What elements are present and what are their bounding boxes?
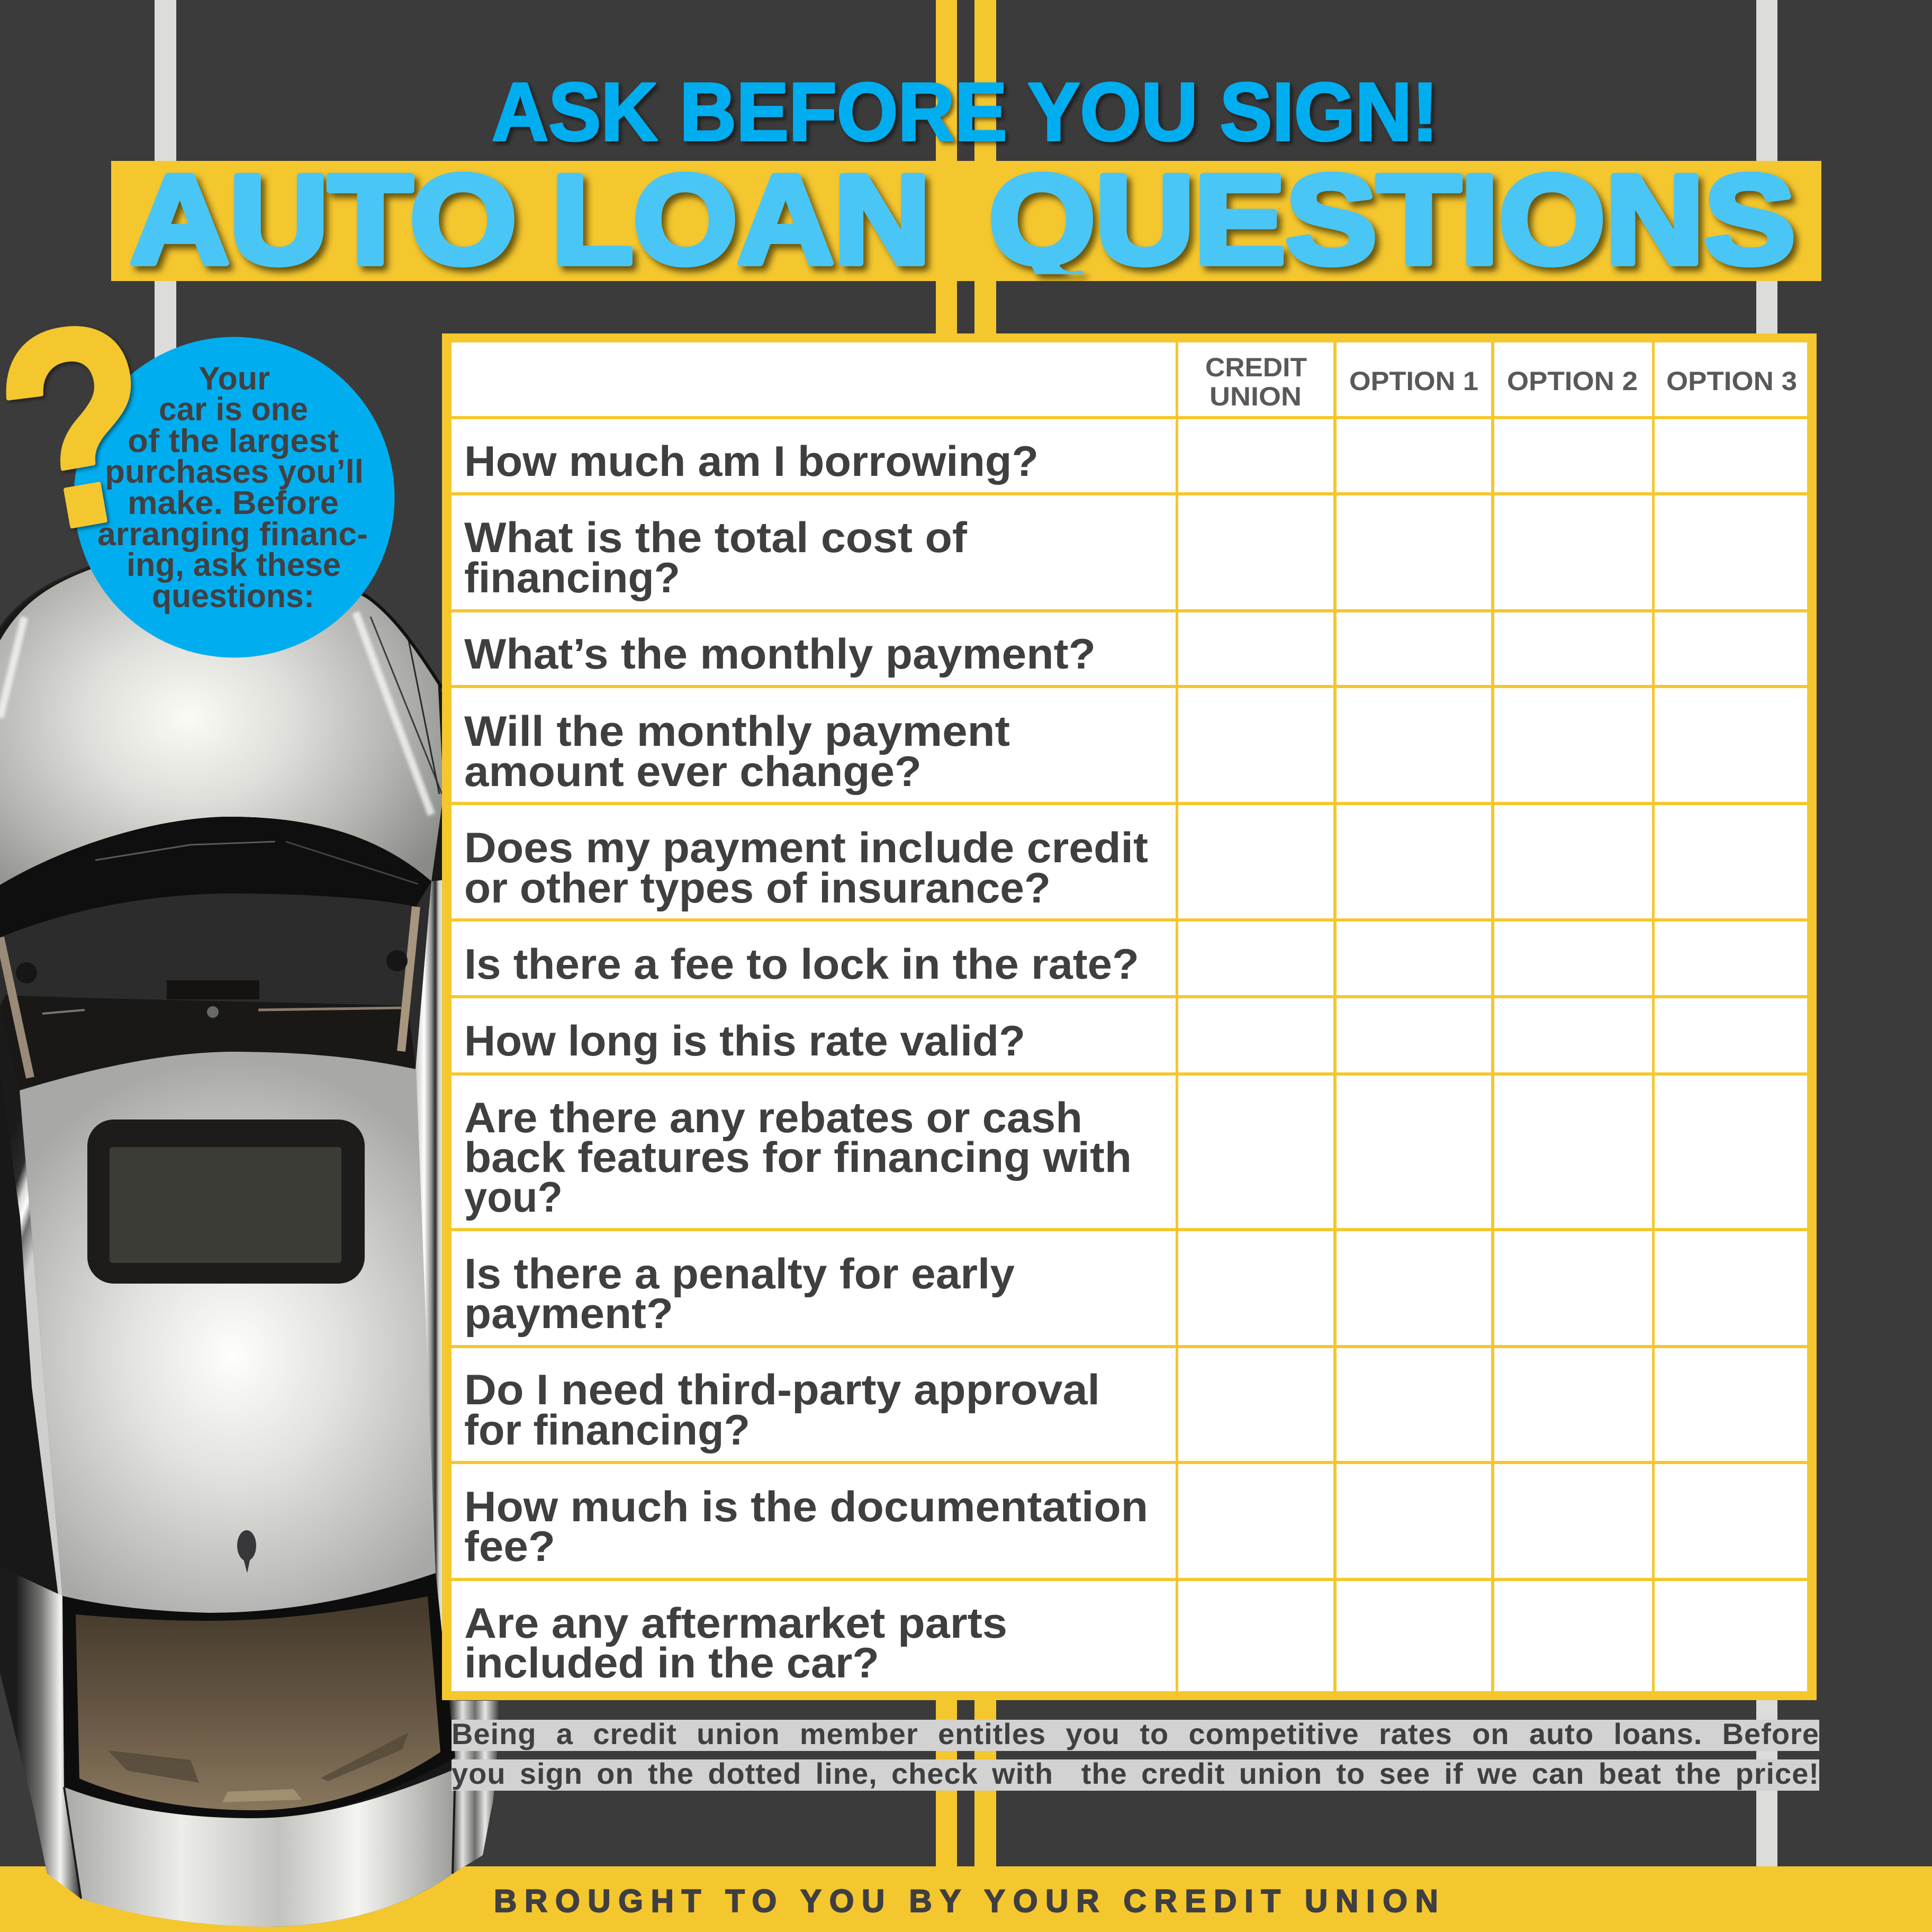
- intro text: car is one: [159, 391, 308, 428]
- grid lines: [452, 342, 1807, 1691]
- question list: Will the monthly payment: [464, 708, 1010, 755]
- intro text: arranging financ-: [97, 516, 368, 553]
- question list: Is there a fee to lock in the rate?: [464, 941, 1139, 988]
- question list: payment?: [464, 1290, 673, 1338]
- title: auto loan questions: LOAN: [552, 149, 931, 290]
- intro text: questions:: [152, 578, 314, 615]
- trunk edge lines: [64, 1769, 455, 1899]
- question list: Does my payment include credit: [464, 824, 1148, 872]
- column headers: UNION: [1209, 382, 1302, 411]
- sunroof: [87, 1120, 365, 1284]
- double yellow center line: [936, 0, 996, 1866]
- right side trim: [416, 879, 455, 1769]
- table body: [452, 342, 1807, 1691]
- circle background: [74, 337, 395, 657]
- question list: for financing?: [464, 1406, 750, 1454]
- question list: amount ever change?: [464, 748, 922, 796]
- rear window interior: [76, 1596, 440, 1810]
- question list: What is the total cost of: [464, 514, 968, 562]
- lower dash shade: [0, 995, 416, 1090]
- intro text: of the largest: [128, 423, 339, 459]
- car, top view: [0, 560, 500, 1927]
- left side trim: [0, 1006, 64, 1641]
- car body base: [0, 560, 500, 1927]
- question list: Is there a penalty for early: [464, 1250, 1015, 1298]
- question list: How long is this rate valid?: [464, 1017, 1025, 1065]
- intro text: purchases you’ll: [105, 454, 364, 490]
- heading: ask before you sign: ASK BEFORE YOU SIGN!: [492, 66, 1438, 158]
- question list: you?: [464, 1173, 563, 1221]
- intro text: make. Before: [128, 485, 339, 521]
- question list: How much is the documentation: [464, 1483, 1148, 1531]
- reflection lines and dash details: [0, 842, 418, 1078]
- column headers: OPTION 1: [1349, 366, 1478, 396]
- left white lane line: [155, 0, 176, 1866]
- title: auto loan questions: AUTO: [130, 149, 517, 290]
- comparison table: [442, 333, 1817, 1700]
- banner background: [111, 161, 1821, 281]
- column headers: OPTION 3: [1666, 366, 1797, 396]
- question list: or other types of insurance?: [464, 864, 1051, 912]
- sunroof glass: [110, 1147, 341, 1263]
- rear quarter right: [442, 1641, 500, 1874]
- hood: [0, 563, 444, 885]
- question list: included in the car?: [464, 1639, 879, 1687]
- title: auto loan questions: [130, 171, 1803, 282]
- footer band: [0, 1866, 1932, 1932]
- roof: [20, 1052, 436, 1613]
- question list: Do I need third-party approval: [464, 1366, 1100, 1414]
- note line 2: you sign on the dotted line, check with the credit union to see if we can beat the price!: [452, 1757, 1819, 1790]
- column headers: OPTION 2: [1507, 366, 1638, 396]
- trunk lid: [64, 1769, 455, 1927]
- intro text: Your: [198, 360, 270, 397]
- column headers: [1205, 353, 1797, 411]
- intro text: [97, 360, 368, 615]
- right white lane line: [1756, 0, 1777, 1866]
- question list: Are any aftermarket parts: [464, 1600, 1007, 1647]
- hood highlights: [0, 566, 442, 815]
- callout circle: [74, 337, 395, 657]
- question list: [464, 438, 1148, 1687]
- rear shelf details: [108, 1732, 409, 1802]
- question list: financing?: [464, 554, 680, 602]
- question list: Are there any rebates or cash: [464, 1094, 1082, 1142]
- note line 1: Being a credit union member entitles you to competitive rates on auto loans. Before: [452, 1717, 1819, 1750]
- title: auto loan questions: QUESTIONS: [989, 149, 1795, 290]
- title banner: [111, 161, 1821, 282]
- question list: fee?: [464, 1523, 555, 1570]
- sunroof frame: [87, 1120, 365, 1284]
- roof emblem: [237, 1530, 256, 1573]
- glass base: [0, 817, 431, 1090]
- question list: What’s the monthly payment?: [464, 630, 1096, 678]
- windshield: [0, 817, 431, 1090]
- column headers: CREDIT: [1205, 353, 1307, 382]
- rear window frame: [62, 1573, 455, 1818]
- intro text: ing, ask these: [127, 547, 341, 583]
- table frame: [442, 333, 1817, 1700]
- question list: How much am I borrowing?: [464, 438, 1039, 485]
- rear quarter left: [0, 1567, 81, 1899]
- question list: back features for financing with: [464, 1134, 1132, 1181]
- upper shade band: [0, 817, 431, 937]
- footer text: BROUGHT TO YOU BY YOUR CREDIT UNION: [494, 1883, 1438, 1919]
